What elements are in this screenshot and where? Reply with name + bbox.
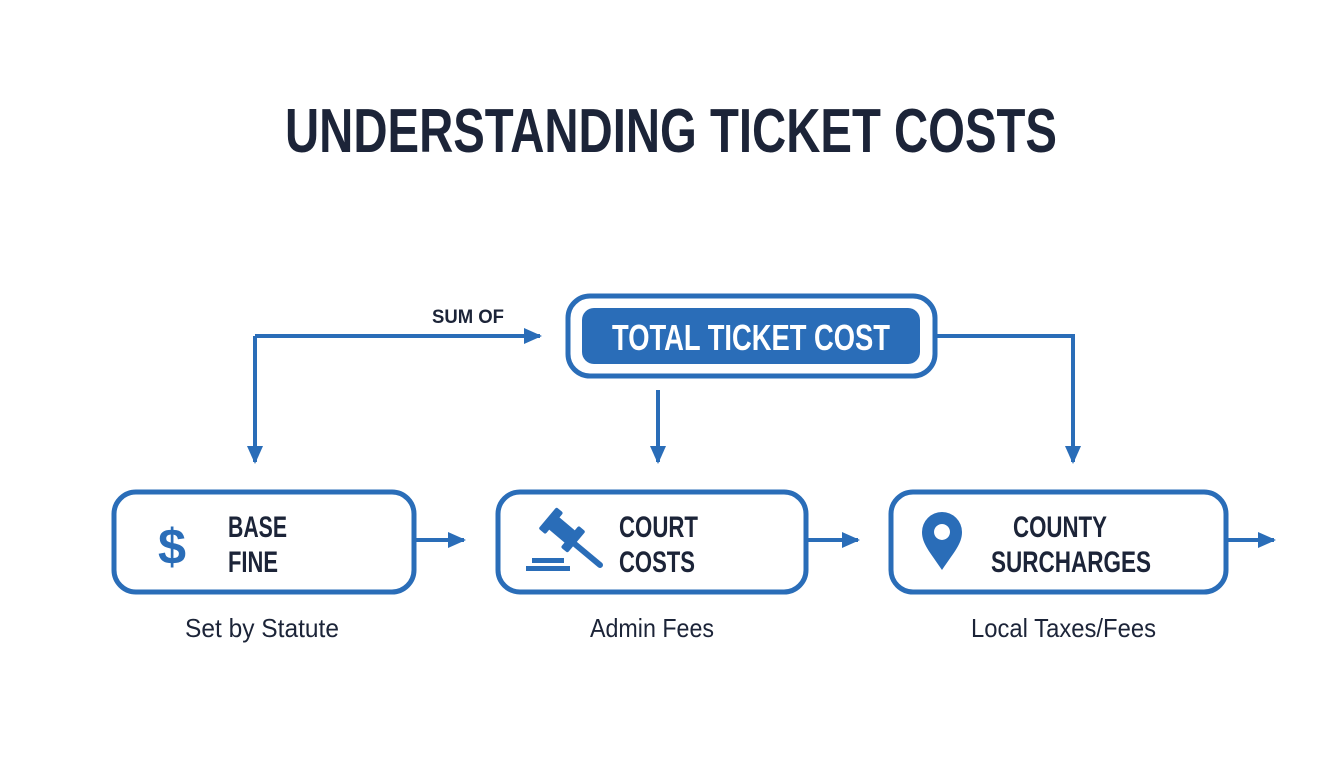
arrow: left connector xyxy=(255,336,540,462)
panel: court costs: COSTS xyxy=(619,546,695,579)
panel: county surcharges: SURCHARGES xyxy=(991,546,1151,579)
panel: court costs: COURT xyxy=(619,511,698,544)
panel: court costs xyxy=(498,492,806,592)
caption: admin fees: Admin Fees xyxy=(590,613,714,643)
icon: gavel xyxy=(526,507,600,571)
panel: base fine: BASE xyxy=(228,511,287,544)
arrow: right connector xyxy=(937,336,1073,462)
label: sum of: SUM OF xyxy=(432,307,504,328)
panel: base fine xyxy=(114,492,414,592)
caption: set by statute: Set by Statute xyxy=(185,613,339,643)
icon: map pin xyxy=(922,512,962,570)
top box: total ticket cost: TOTAL TICKET COST xyxy=(612,317,890,358)
panel: base fine: FINE xyxy=(228,546,278,579)
arrow: county out xyxy=(1226,538,1274,542)
icon: dollar: $ xyxy=(158,519,186,575)
caption: local taxes: Local Taxes/Fees xyxy=(971,613,1156,643)
arrow: base to court xyxy=(414,538,464,542)
panel: county surcharges: COUNTY xyxy=(1013,511,1107,544)
title: UNDERSTANDING TICKET COSTS xyxy=(285,97,1057,166)
arrow: center connector xyxy=(656,390,660,462)
panel: county surcharges xyxy=(891,492,1226,592)
arrow: court to county xyxy=(806,538,858,542)
top box: total ticket cost xyxy=(568,296,935,376)
